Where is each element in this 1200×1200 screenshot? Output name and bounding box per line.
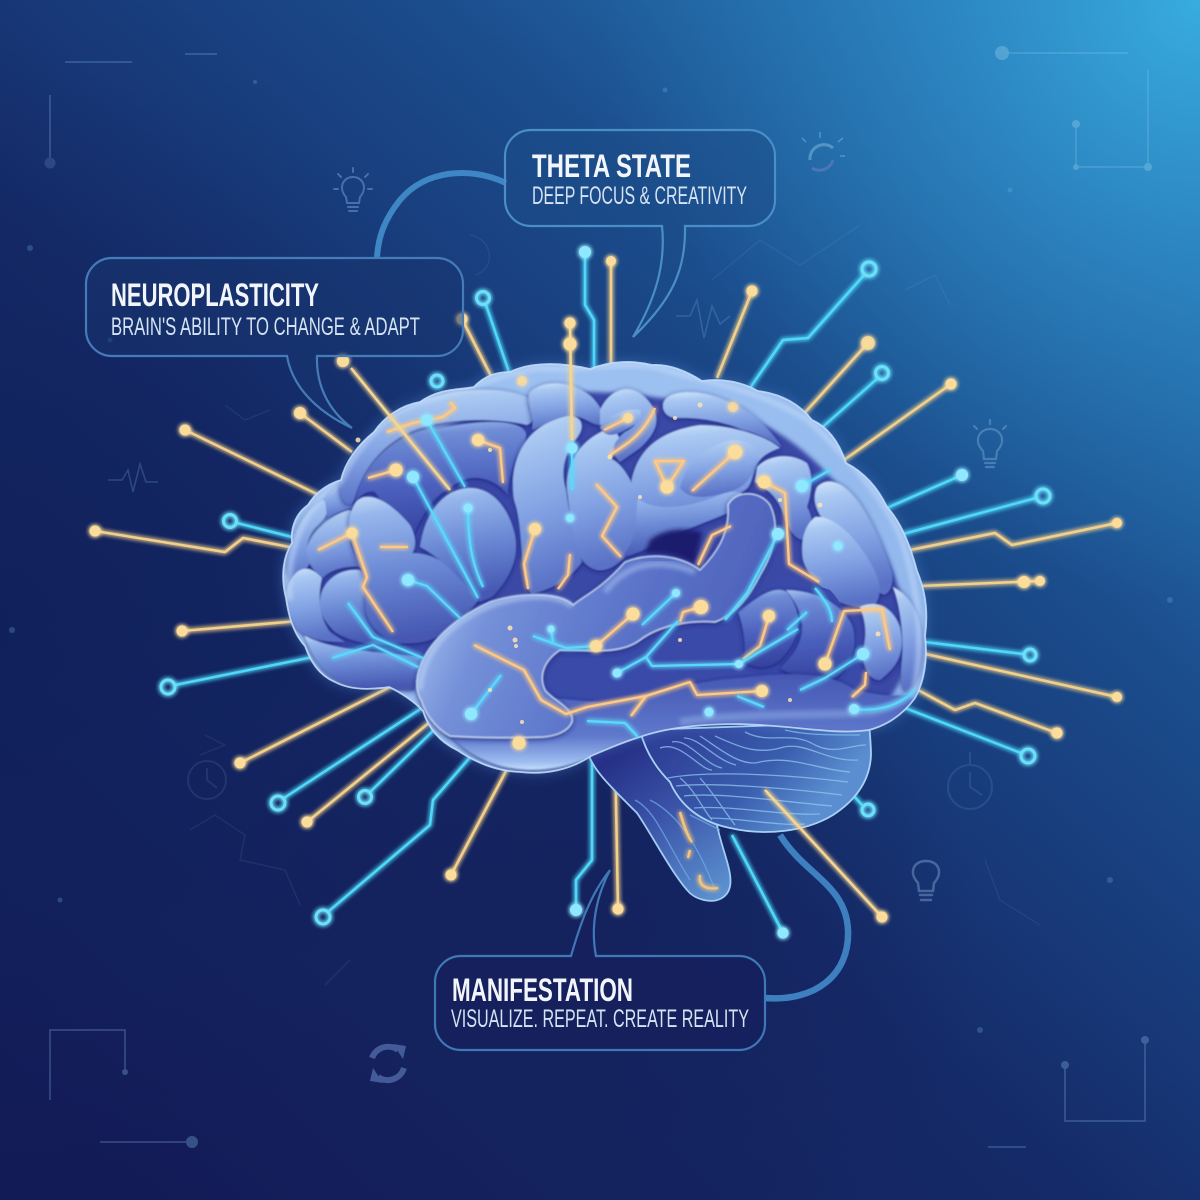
text: manifestation description: VISUALIZE. REPEAT. CREATE REALITY — [451, 1005, 749, 1033]
icon: faint light bulb lower right — [913, 861, 939, 900]
dark mid temporal band — [554, 586, 842, 702]
central lobes — [513, 383, 782, 594]
lower temporal band — [417, 674, 920, 770]
outer rim highlight — [289, 365, 919, 698]
upper left lobes — [340, 390, 536, 643]
cerebellum — [640, 722, 871, 832]
internal circuit traces cyan — [332, 420, 915, 737]
small sparkle dots on brain — [356, 402, 880, 724]
circuit lines gold behind brain — [95, 261, 1117, 909]
background particles — [9, 80, 1173, 1033]
brain cerebrum — [283, 362, 926, 773]
icon: faint refresh arrows — [370, 1044, 406, 1083]
icon: faint clock left — [188, 761, 226, 799]
callout: neuroplasticity — [86, 258, 463, 428]
heading: neuroplasticity: NEUROPLASTICITY — [111, 277, 319, 313]
icon: faint clock right — [948, 752, 992, 809]
icon: faint light bulb top left — [334, 168, 372, 211]
heading: manifestation: MANIFESTATION — [452, 972, 633, 1008]
icon: faint light bulb right — [974, 420, 1006, 467]
brain outer glow — [283, 362, 926, 773]
inner shadowed backing of the folds — [296, 392, 907, 706]
brain stem — [587, 730, 730, 901]
node dots gold — [90, 256, 1122, 922]
callout: theta state — [505, 130, 775, 337]
icon: faint heartbeat traces — [108, 300, 730, 492]
callout: manifestation — [435, 870, 765, 1050]
connector: manifestation arc — [765, 835, 848, 998]
internal circuit traces gold — [318, 402, 890, 716]
very faint scattered molecule traces — [190, 225, 1040, 985]
node dots cyan — [402, 246, 968, 938]
heading: theta state: THETA STATE — [532, 148, 691, 184]
ring nodes cyan — [161, 262, 1050, 924]
connector: theta arc — [377, 173, 506, 258]
text: neuroplasticity description: BRAIN'S ABILITY TO CHANGE & ADAPT — [111, 313, 420, 341]
circuit lines cyan behind brain — [175, 252, 1036, 933]
upper temporal lobe — [417, 494, 775, 738]
dark cavity under central fold — [645, 530, 702, 565]
right lobes — [755, 456, 922, 691]
icon: faint cycle emblem top — [802, 132, 845, 170]
text: theta state description: DEEP FOCUS & CREATIVITY — [532, 182, 747, 210]
rim lobes on the left — [285, 480, 432, 690]
circuit lines overlapping brain — [351, 323, 882, 917]
